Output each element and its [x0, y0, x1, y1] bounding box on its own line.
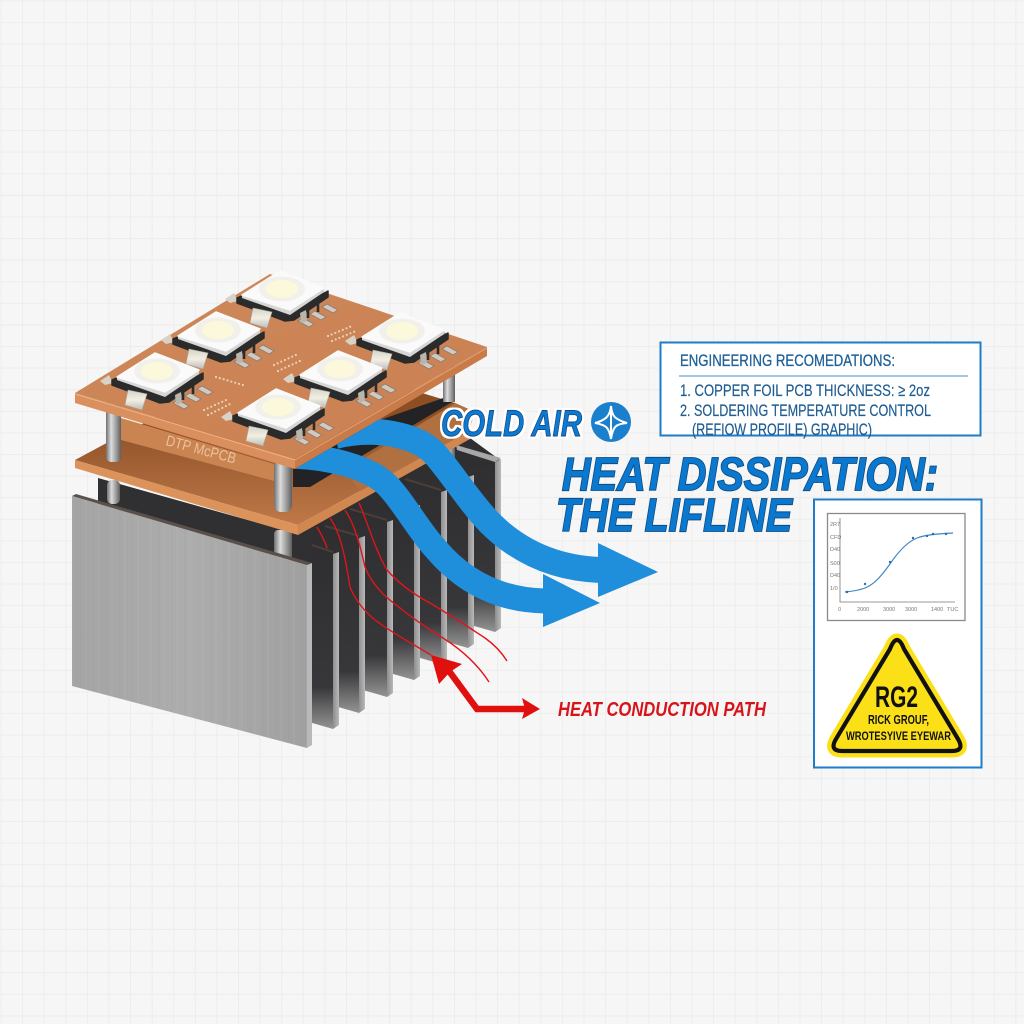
heat conduction label: HEAT CONDUCTION PATH: [558, 699, 766, 721]
recommendation 2 continuation: (REFIOW PROFILE) GRAPHIC): [692, 420, 872, 439]
LED module 2: [161, 312, 274, 369]
LED module 1: [225, 271, 338, 328]
title: [556, 448, 938, 541]
RG2 warning sign: WROTESYIVE EYEWAR: [846, 729, 951, 743]
board spacer with label: [121, 418, 274, 481]
reflow profile chart: [828, 514, 965, 620]
top copper board: [75, 274, 487, 469]
front heat sink plate: [72, 494, 312, 748]
lower copper board: [75, 350, 475, 535]
recommendation 1: 1. COPPER FOIL PCB THICKNESS: ≥ 2oz: [680, 381, 930, 400]
red double-headed arrow: [431, 655, 540, 719]
LED module 6: [221, 389, 334, 446]
y axis labels: 2R7: [830, 522, 840, 528]
RG2 warning sign: RICK GROUF,: [868, 713, 929, 727]
circuit board stack: [75, 271, 487, 535]
panel: reflow chart and safety sign: [814, 500, 982, 768]
x axis labels: 0: [838, 607, 841, 613]
panel: engineering recommendations: [660, 342, 980, 439]
y axis labels: 1/0: [830, 586, 838, 592]
title line 1: HEAT DISSIPATION:: [562, 448, 938, 500]
x axis labels: 2000: [857, 607, 869, 613]
heat sink: [72, 438, 501, 748]
x axis labels: 3000: [883, 607, 895, 613]
y axis labels: S00: [830, 561, 840, 567]
y axis labels: D40: [830, 547, 840, 553]
heat sink fins: [288, 438, 501, 729]
solder dot clusters: [204, 326, 356, 415]
lower posts: [107, 440, 455, 564]
x axis labels: 1400: [931, 607, 943, 613]
y axis labels: CFD: [830, 535, 841, 541]
board spacer with label: DTP McPCB: [164, 432, 238, 467]
y axis labels: [830, 522, 841, 592]
title line 2: THE LIFLINE: [556, 489, 793, 541]
LED module 4: [100, 353, 213, 410]
data points: [846, 533, 947, 593]
y axis labels: D40: [830, 573, 840, 579]
RG2 warning sign: [834, 640, 960, 751]
x axis labels: [838, 607, 958, 613]
heat sink back block: [98, 478, 312, 572]
blue cold air arrow, lower: [285, 456, 600, 627]
recommendation 2: 2. SOLDERING TEMPERATURE CONTROL: [680, 401, 931, 420]
icon: cold air fan: [591, 402, 631, 442]
red heat conduction lines: [317, 503, 507, 682]
cold air label: COLD AIR: [441, 403, 582, 444]
x axis labels: 3000: [905, 607, 917, 613]
x axis labels: TUC: [947, 607, 958, 613]
LED module 5: [283, 351, 396, 408]
upper posts: [106, 350, 455, 512]
panel heading: ENGINEERING RECOMEDATIONS:: [680, 352, 895, 370]
dark thermal component: [293, 395, 452, 487]
blue cold air arrow, upper: [335, 432, 658, 597]
reflow curve: [845, 533, 953, 592]
LED module 3: [345, 313, 458, 370]
RG2 warning sign: RG2: [875, 681, 918, 714]
